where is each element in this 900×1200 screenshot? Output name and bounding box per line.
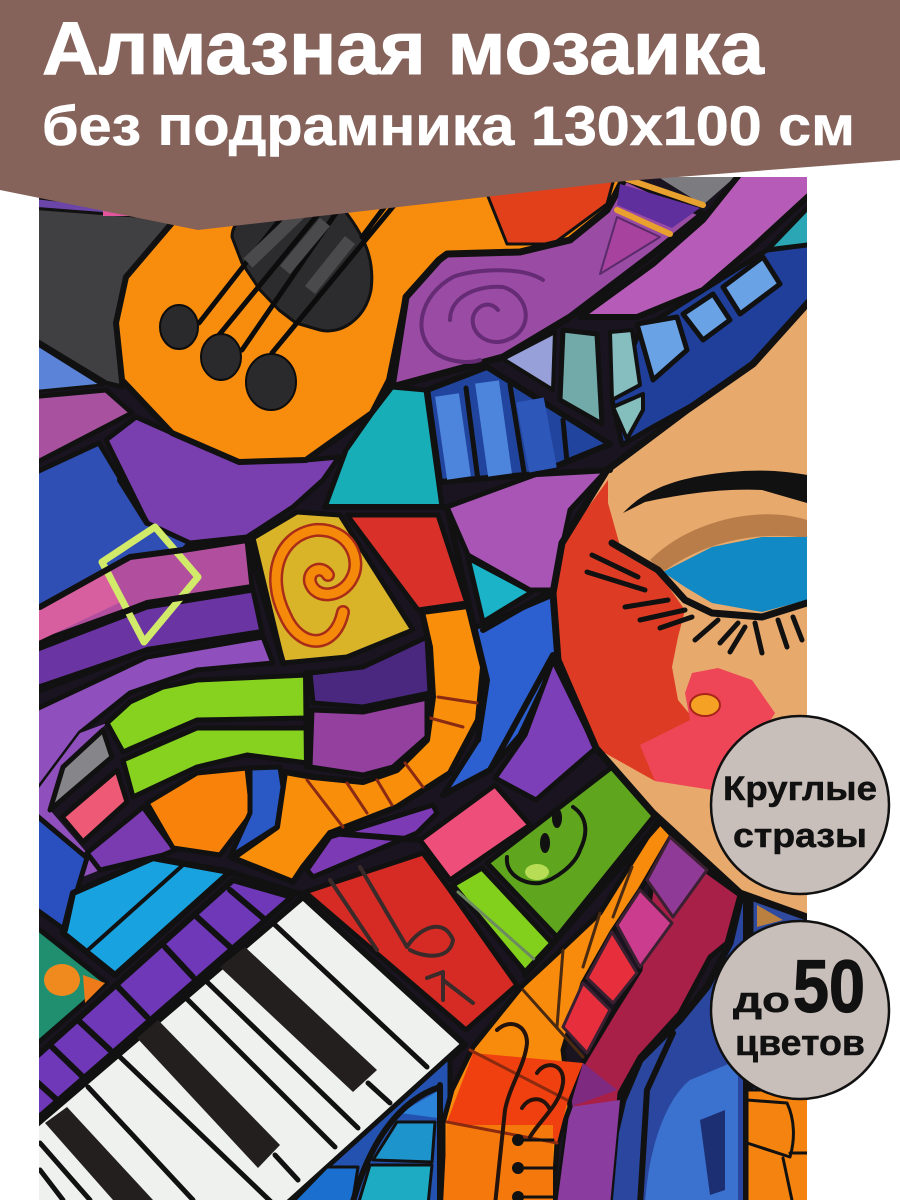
smiley [525, 864, 549, 880]
grey and pink tiles [50, 730, 175, 870]
small magenta triangle [600, 217, 660, 274]
guitar pegs [160, 305, 296, 410]
keyboard [30, 880, 465, 1200]
black contour lines [40, 470, 660, 975]
violin scroll [495, 1024, 563, 1200]
left upper purple panel [106, 417, 339, 543]
eyelid shadow [650, 514, 807, 572]
purple and pink tiles [647, 837, 707, 917]
orange and blue curl [147, 767, 283, 857]
pink tile [420, 785, 530, 880]
guitar red circle [487, 175, 615, 244]
purple thin band [307, 805, 437, 877]
eyebrow [623, 471, 807, 513]
banner [0, 0, 900, 230]
purple key strip [30, 880, 292, 1125]
guitar sound hole [232, 205, 372, 331]
crimson band [557, 825, 740, 1200]
title: Алмазная мозаика [42, 6, 765, 90]
left purple bands [39, 544, 276, 876]
purple spiral panel [392, 170, 743, 387]
lower left blue panels [30, 810, 230, 975]
magenta band [580, 170, 815, 317]
subtitle: без подрамника 130x100 см [42, 94, 855, 157]
upper right blue stained glass [325, 200, 815, 507]
right magenta panel [443, 470, 607, 800]
yellow spiral panel [253, 512, 413, 663]
green peacock fragment [39, 926, 110, 1046]
blue hair [608, 900, 750, 1200]
orange violin panel [443, 820, 707, 1200]
badge: round rhinestones [711, 716, 889, 894]
left blue panel [30, 443, 190, 612]
guitar body [116, 175, 625, 462]
cheek red [553, 480, 775, 790]
guitar string highlights [248, 213, 350, 290]
spiral [421, 270, 543, 362]
badge: round rhinestones: Круглые [723, 770, 877, 808]
green smiley panel [453, 757, 655, 972]
eyelid [663, 537, 807, 612]
badge: round rhinestones: стразы [733, 817, 867, 855]
bottom blue triangle [285, 1045, 462, 1200]
top-left grey area [39, 198, 168, 464]
badge: up to 50 colours: до [733, 979, 790, 1020]
right tan and blue background [740, 895, 815, 1200]
face [553, 290, 825, 925]
bottom right orange panel [747, 1090, 815, 1200]
orange swirl [690, 694, 720, 716]
top grey tile [660, 177, 734, 203]
key lines [40, 923, 427, 1200]
painting: abstract musical mosaic [30, 170, 825, 1200]
face outline [553, 295, 815, 920]
top purple tile [617, 184, 700, 228]
guitar strings [199, 203, 396, 353]
orange J shape [233, 606, 483, 882]
eyelashes [587, 555, 802, 653]
pink swirl [640, 668, 775, 792]
badge: up to 50 colours: 50 [793, 945, 865, 1028]
badge: up to 50 colours: цветов [735, 1022, 865, 1063]
red panel [347, 515, 467, 610]
dark purple panels [310, 637, 430, 775]
badge: up to 50 colours [711, 921, 889, 1099]
black keys [220, 947, 377, 1092]
orange stripes [617, 179, 703, 234]
skin corner [757, 905, 783, 927]
lime diamond outline [102, 527, 198, 642]
lash line [612, 543, 807, 617]
green bars [107, 675, 307, 797]
red panel with note [305, 853, 517, 1030]
